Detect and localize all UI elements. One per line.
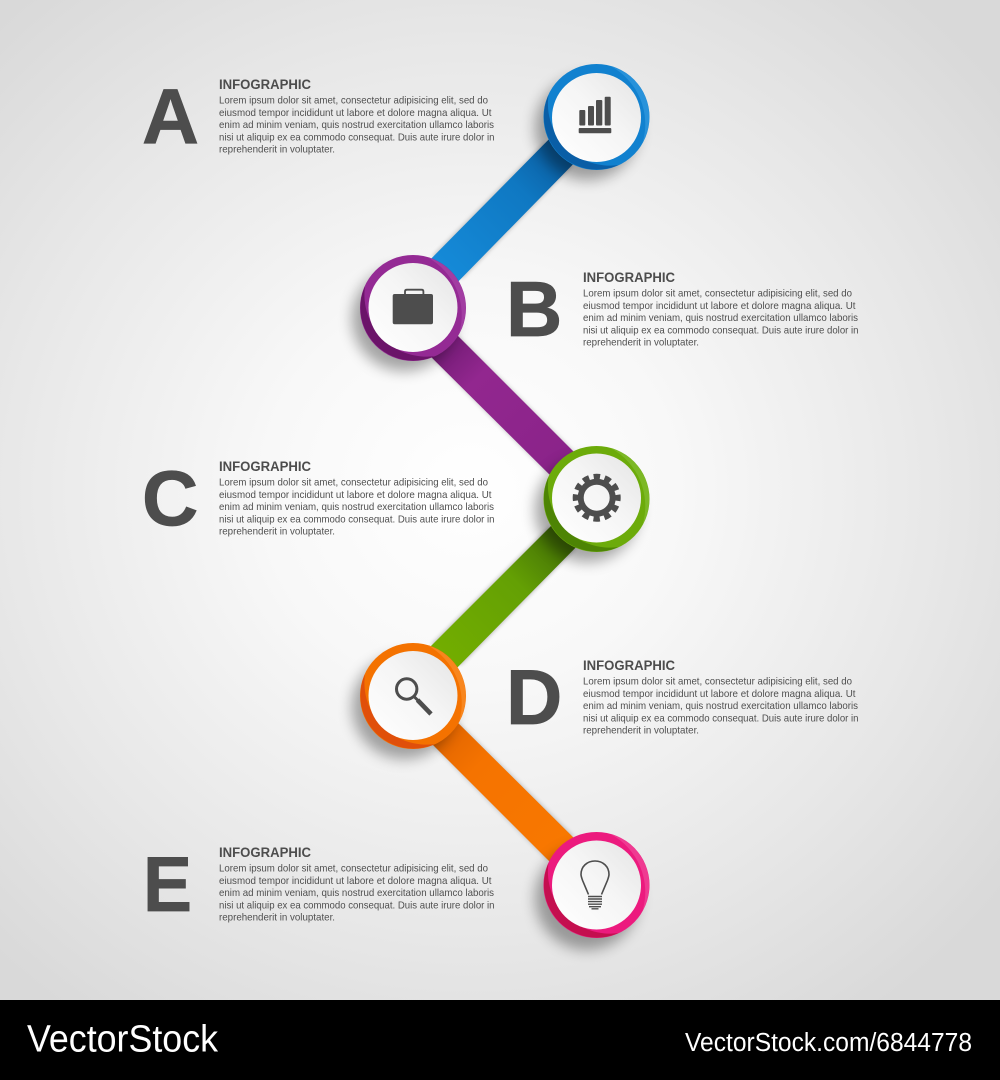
text block A: INFOGRAPHIC [219,77,311,92]
text block E: reprehenderit in voluptater. [219,912,335,924]
node B: purple circle with briefcase icon [352,255,466,371]
text block D: enim ad minim veniam, quis nostrud exercitation ullamco laboris [583,701,858,712]
icon: gear [576,477,617,518]
text block C: enim ad minim veniam, quis nostrud exercitation ullamco laboris [219,502,494,513]
text block C: eiusmod tempor incididunt ut labore et dolore magna aliqua. Ut [219,490,492,501]
node C: green circle with gear icon [535,446,650,562]
ribbon: orange [418,705,585,872]
text block A: Lorem ipsum dolor sit amet, consectetur adipisicing elit, sed do [219,96,488,106]
node E: pink circle with light bulb icon [535,832,650,950]
icon: briefcase [393,290,433,324]
text block D [583,658,859,736]
letter D: D [506,653,562,741]
ribbon: green [420,512,590,677]
text block D: reprehenderit in voluptater. [583,726,699,736]
text block A: eiusmod tempor incididunt ut labore et dolore magna aliqua. Ut [219,108,492,119]
text block B: INFOGRAPHIC [583,270,675,285]
text block B: eiusmod tempor incididunt ut labore et dolore magna aliqua. Ut [583,301,856,312]
text block B: reprehenderit in voluptater. [583,338,699,348]
letter B: B [506,265,562,353]
text block B: nisi ut aliquip ex ea commodo consequat. Duis aute irure dolor in [583,326,859,336]
text block C: INFOGRAPHIC [219,459,311,474]
text block D: eiusmod tempor incididunt ut labore et dolore magna aliqua. Ut [583,689,856,700]
footer bar [0,1000,1000,1080]
icon: light bulb [581,861,609,909]
text block E: nisi ut aliquip ex ea commodo consequat. Duis aute irure dolor in [219,900,495,912]
icon: bar chart [579,97,611,133]
ribbon: blue [420,128,587,293]
text block C [219,459,495,538]
letter E: E [143,840,192,928]
text block C: reprehenderit in voluptater. [219,526,335,538]
text block D: INFOGRAPHIC [583,658,675,673]
icon: magnifier [396,679,431,714]
text block A: reprehenderit in voluptater. [219,144,335,156]
text block C: nisi ut aliquip ex ea commodo consequat. Duis aute irure dolor in [219,514,495,526]
text block A [219,77,495,156]
text block E: Lorem ipsum dolor sit amet, consectetur adipisicing elit, sed do [219,864,488,874]
text block B: enim ad minim veniam, quis nostrud exercitation ullamco laboris [583,313,858,324]
text block C: Lorem ipsum dolor sit amet, consectetur adipisicing elit, sed do [219,478,488,488]
node D: orange circle with magnifier icon [352,643,466,759]
node A: blue circle with bar chart icon [535,64,650,180]
text block E: eiusmod tempor incididunt ut labore et dolore magna aliqua. Ut [219,876,492,887]
text block A: enim ad minim veniam, quis nostrud exercitation ullamco laboris [219,120,494,131]
ribbon: purple [416,318,585,485]
letter C: C [142,454,198,542]
text block D: Lorem ipsum dolor sit amet, consectetur adipisicing elit, sed do [583,676,852,688]
text block D: nisi ut aliquip ex ea commodo consequat. Duis aute irure dolor in [583,714,859,724]
text block B: Lorem ipsum dolor sit amet, consectetur adipisicing elit, sed do [583,288,852,300]
text block E: INFOGRAPHIC [219,845,311,860]
letter A: A [142,72,199,160]
text block E: enim ad minim veniam, quis nostrud exercitation ullamco laboris [219,888,494,899]
text block B [583,270,859,348]
footer logo: VectorStock [27,1018,219,1060]
text block E [219,845,495,924]
footer url: VectorStock.com/6844778 [685,1029,972,1057]
text block A: nisi ut aliquip ex ea commodo consequat. Duis aute irure dolor in [219,132,495,144]
